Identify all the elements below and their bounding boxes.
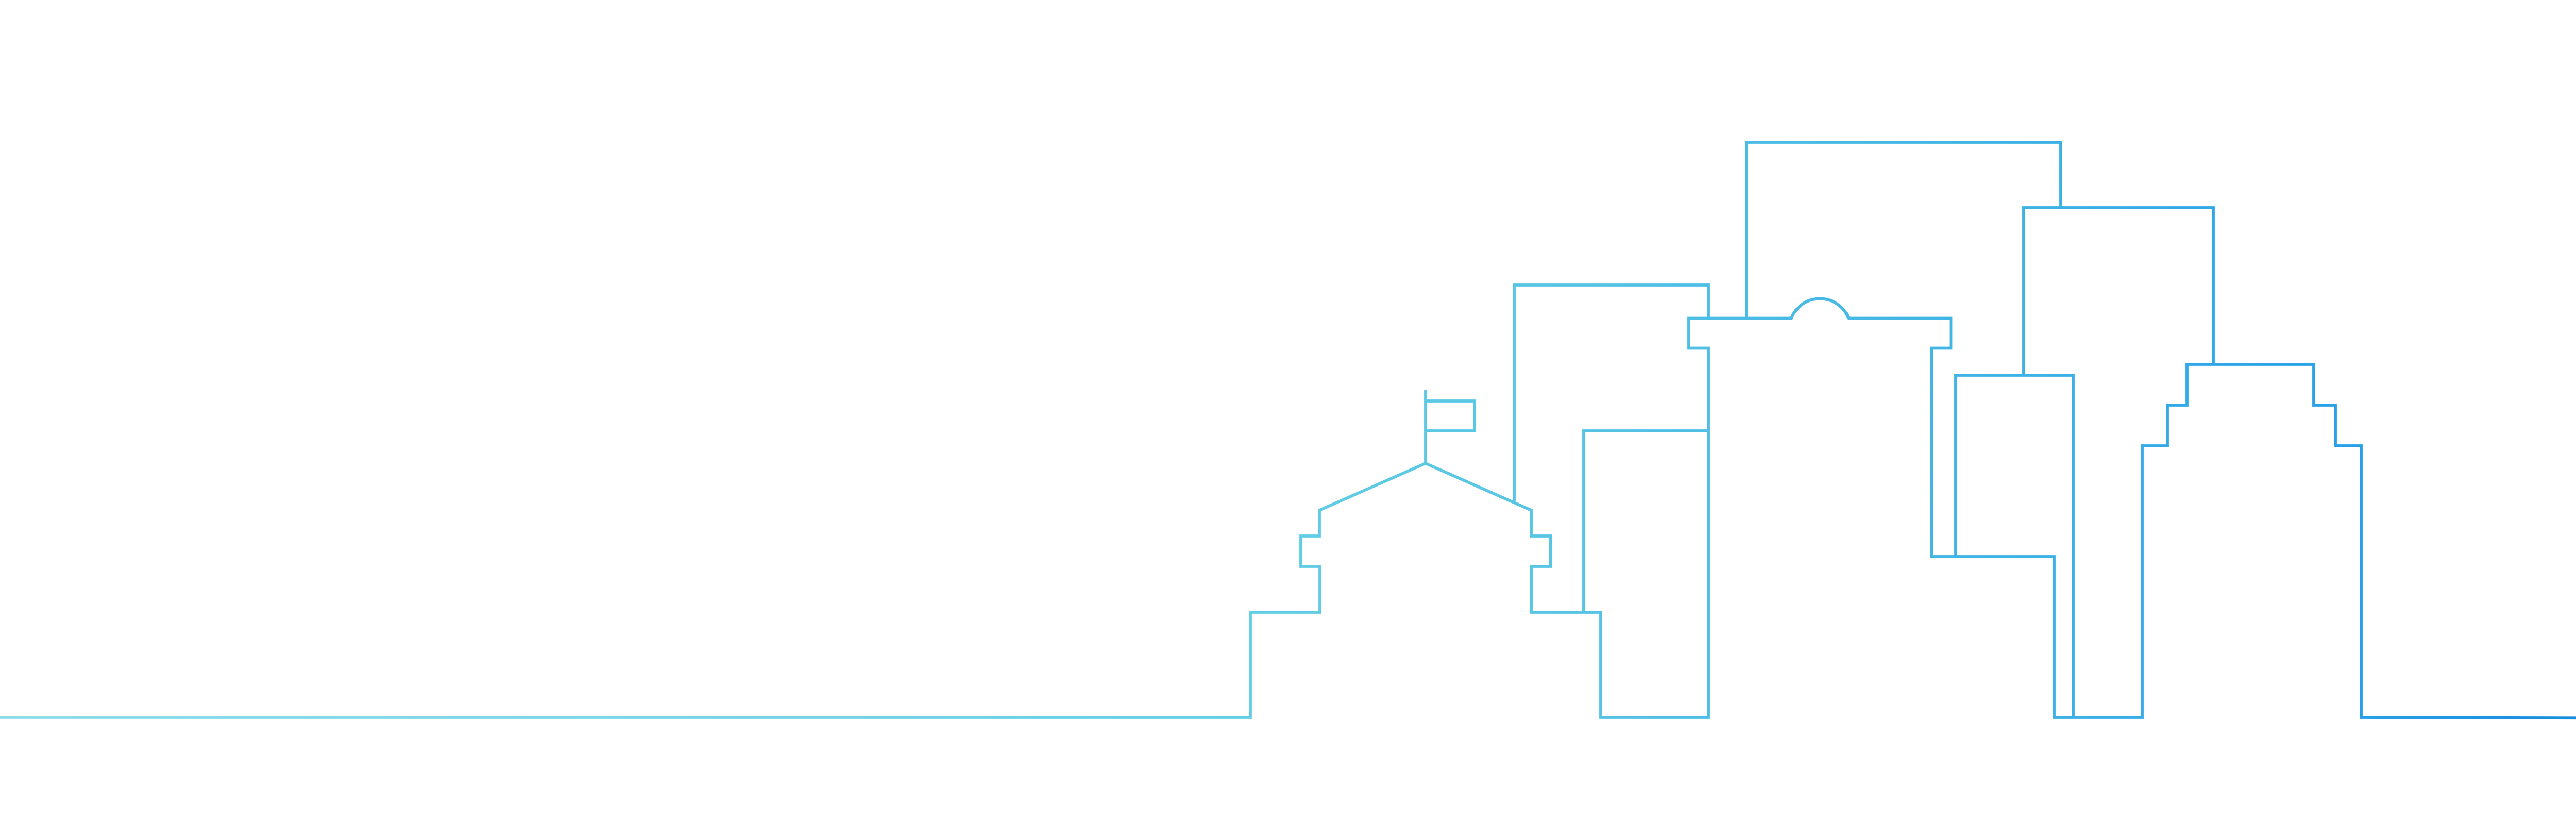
skyline outline with ground line	[0, 298, 2576, 718]
second tower	[2024, 208, 2213, 375]
tallest tower	[1747, 142, 2061, 319]
inner building block	[1584, 431, 1708, 612]
flag on central spire	[1426, 390, 1475, 463]
building behind spire, left	[1514, 285, 1708, 501]
front block	[1956, 375, 2073, 717]
